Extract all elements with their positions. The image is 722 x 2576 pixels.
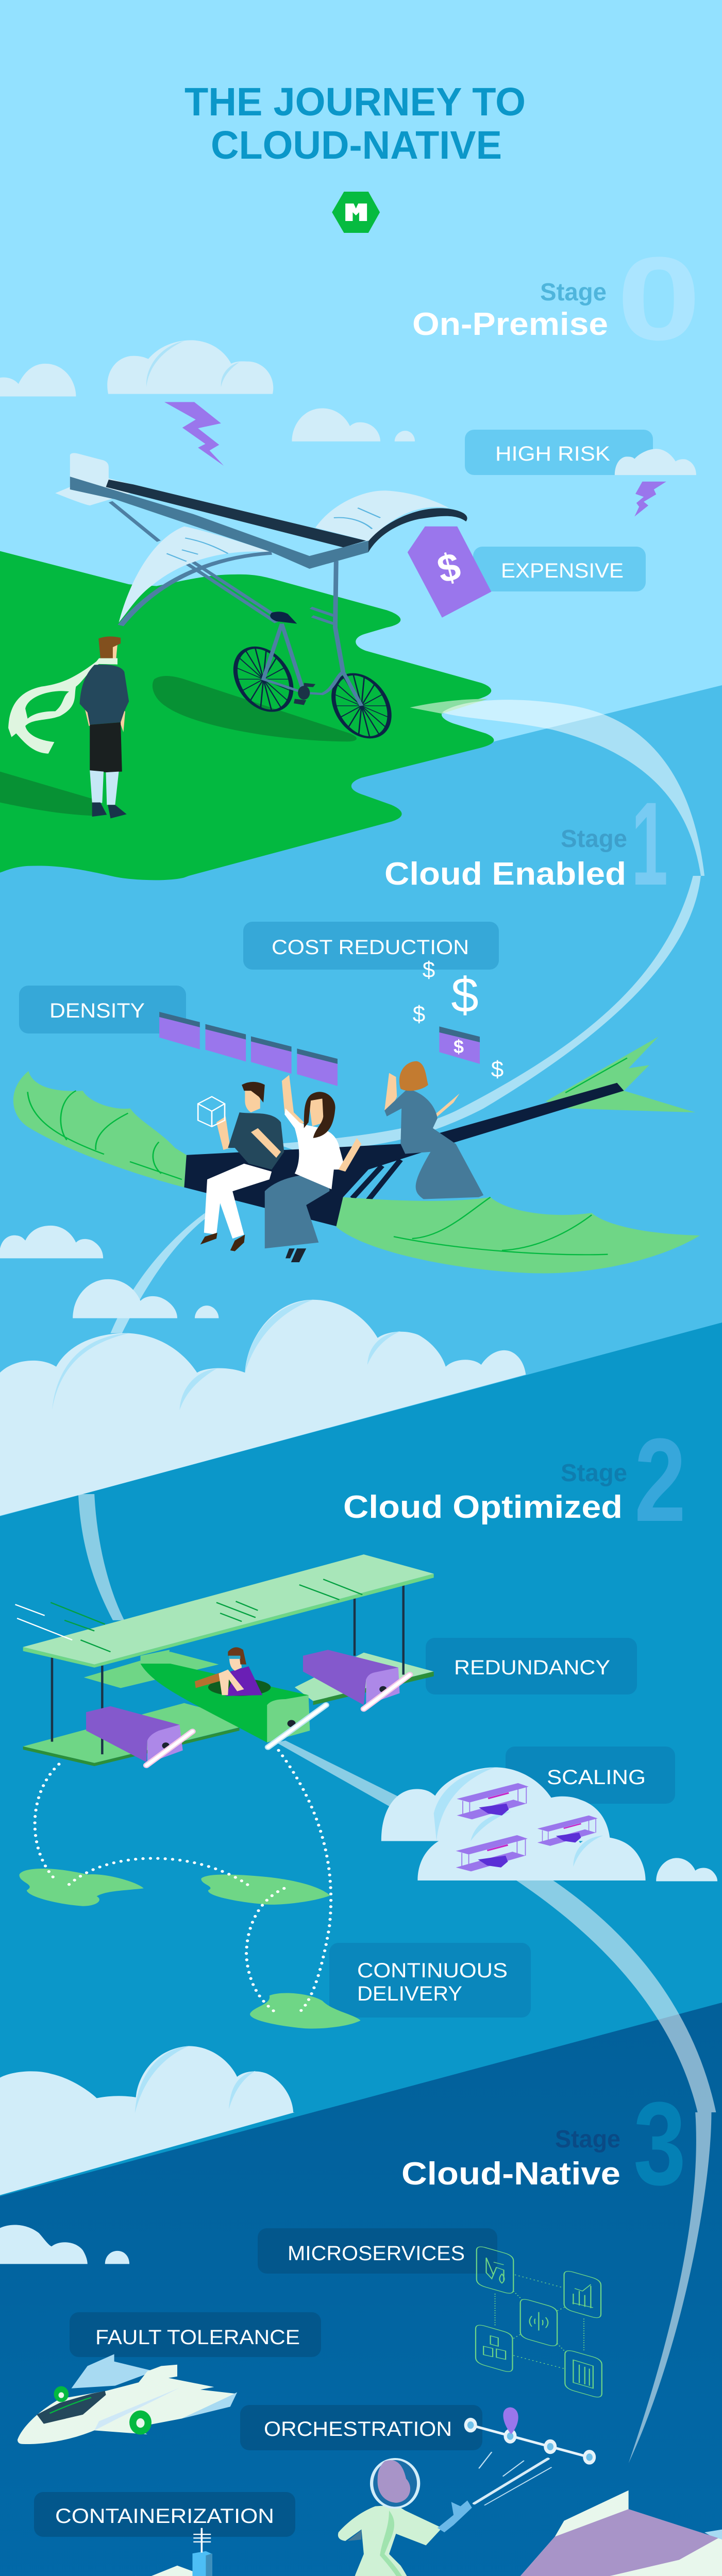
icon: purple pin [503,2407,518,2434]
figure: astronaut [293,2459,472,2576]
tag: price tag [408,527,491,618]
illustration: flying bicycle [55,453,467,737]
trail: swoosh stage 0 to 1 [410,699,704,876]
illustration: biplane [15,1554,434,1766]
icon: mini biplane 2 [456,1835,528,1871]
clouds: stage 1 small [0,1226,219,1318]
diagram: orchestration nodes [464,2407,596,2505]
icon: left engine [86,1706,192,1766]
dollar signs: $ [491,1057,503,1082]
icon: mini jet 1 [114,2575,166,2576]
icon: density windows [159,1012,338,1086]
cloud: large stage 2 to 3 [0,2046,295,2195]
icon: lightning bolt [164,402,224,466]
figure: woman in blue [384,1061,483,1199]
label: redundancy [426,1638,637,1694]
dollar signs [413,957,503,1082]
label: scaling [506,1747,675,1804]
tag: price tag: $ [433,544,465,592]
islands [19,1869,361,2028]
panel: stage 0 heading [412,232,701,365]
icon: dollar window [439,1026,480,1064]
panel: stage 2 heading: Stage [561,1460,627,1487]
cloud over high risk [615,449,696,475]
label: density: DENSITY [49,999,145,1022]
icon: bike rear wheel [228,648,298,711]
label: expensive [473,547,646,591]
icon: mini biplane 3 [538,1816,598,1846]
shadow: bike [153,676,357,741]
clouds: stage 3 upper left [0,2225,129,2264]
trail: stage 3 swoosh [629,2112,711,2463]
label: scaling: SCALING [547,1766,646,1789]
title: CLOUD-NATIVE [211,123,502,167]
label: redundancy: REDUNDANCY [454,1656,610,1679]
panel: stage 3 heading: Stage [555,2126,620,2153]
trail: stage 1 swoosh [110,876,701,1333]
dollar signs: $ [413,1002,425,1027]
title: THE JOURNEY TO [184,80,526,124]
panel: stage 2 heading: 2 [634,1414,686,1546]
panel: stage 2 heading: Cloud Optimized [343,1489,623,1525]
shadow: person [0,772,97,816]
panel: stage 3 heading [401,2077,686,2210]
figure: pilot with telescope [195,1647,262,1696]
title [184,80,526,167]
panel: stage 3 heading: Cloud-Native [401,2156,620,2192]
label: density [19,986,186,1033]
panel: stage 1 heading: Stage [561,825,627,853]
figure: man with cube [198,1082,284,1251]
background: stage 1 sky [0,685,722,2576]
panel: stage 0 heading: 0 [617,232,701,365]
panel: stage 0 heading: Stage [540,279,607,306]
clouds: scaling cluster with mini planes [381,1767,717,1882]
label: orchestration: ORCHESTRATION [264,2418,452,2441]
label: fault tolerance: FAULT TOLERANCE [95,2326,300,2349]
illustration: small spaceship [18,2354,237,2444]
label: continuous delivery: CONTINUOUS [357,1959,508,1982]
icon: small lightning bolt [634,482,666,517]
icon: bike front wheel [327,674,396,737]
panel: stage 1 heading: 1 [631,777,668,910]
figure: woman in white [265,1075,361,1262]
label: continuous delivery [329,1943,531,2018]
icon: nose propeller [268,1705,326,1747]
dollar signs: $ [454,1036,464,1057]
icon: small logo hexagon [332,192,380,233]
icon: right engine [303,1650,410,1709]
trail: stage 2 swoosh [78,1494,716,2112]
cloud: large stage 1 to 2 [0,1300,526,1516]
label: containerization [34,2492,295,2537]
panel: stage 2 heading [343,1414,686,1546]
label: cost reduction [243,922,499,970]
dotted flight paths [35,1750,331,2014]
dollar signs: $ [451,968,479,1023]
icon: mini biplane 1 [457,1783,529,1819]
label: continuous delivery: DELIVERY [357,1982,462,2005]
panel: stage 3 heading: 3 [633,2077,686,2210]
label: microservices: MICROSERVICES [288,2242,465,2265]
icon: cube [198,1097,225,1127]
diagram: microservices grid [476,2247,602,2397]
background: stage 2 sky [0,1323,722,2576]
label: microservices [258,2228,497,2274]
illustration: leaf-winged glider with people [13,1012,700,1273]
label: expensive: EXPENSIVE [501,560,624,582]
figure: standing person with scarf [8,636,129,819]
label: fault tolerance [70,2312,321,2357]
clouds: stage 0 upper [0,340,415,442]
panel: stage 1 heading [384,777,668,910]
label: cost reduction: COST REDUCTION [272,936,469,959]
label: high risk [465,430,653,475]
label: containerization: CONTAINERIZATION [55,2505,274,2528]
illustration: large spaceship [389,2490,722,2576]
panel: stage 0 heading: On-Premise [412,307,608,342]
label: orchestration [240,2405,482,2450]
background: stage 3 sky [0,2003,722,2576]
label: high risk: HIGH RISK [495,443,610,465]
panel: stage 1 heading: Cloud Enabled [384,856,626,892]
illustration: aircraft carrier [54,2528,282,2576]
dollar signs: $ [423,957,435,982]
land: green hill [0,551,494,880]
